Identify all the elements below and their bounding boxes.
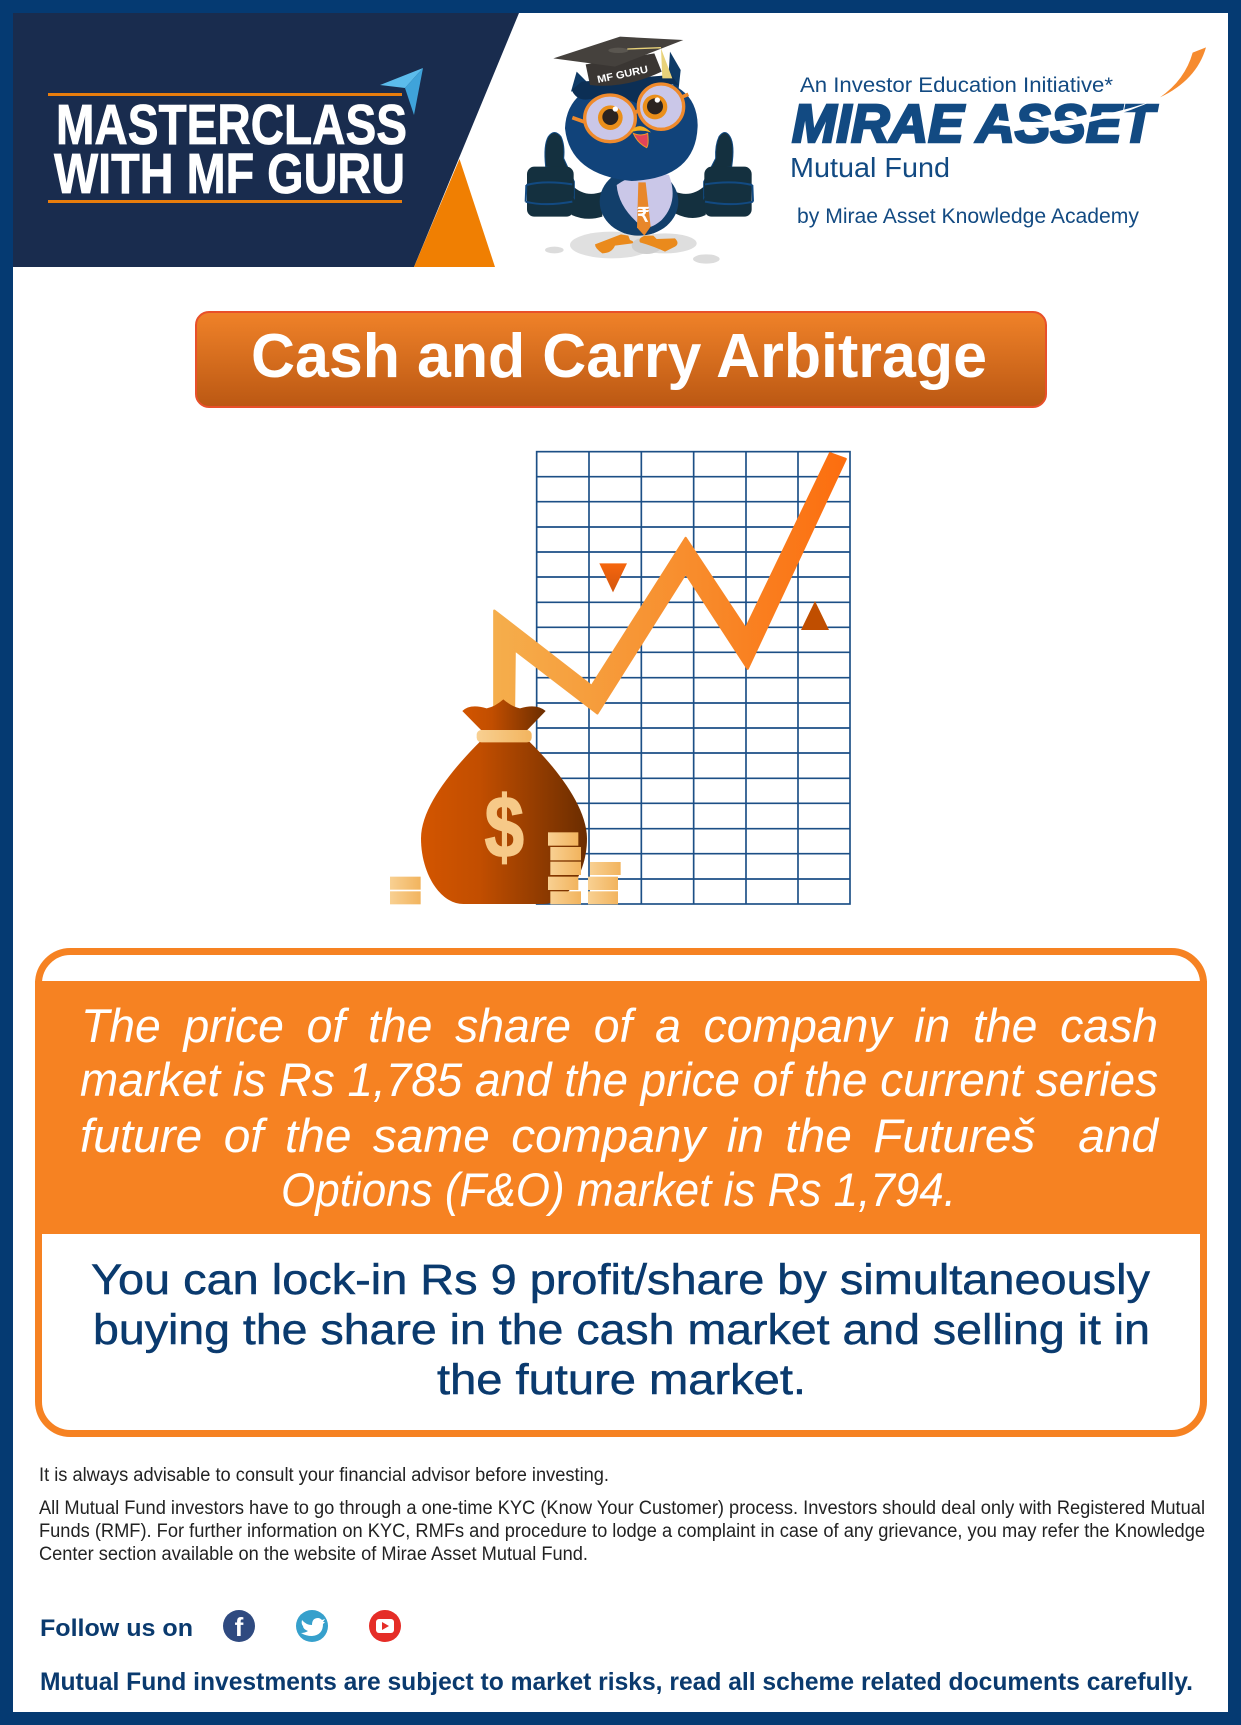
cap label: MF GURU [596, 64, 649, 86]
coin stacks [390, 832, 621, 904]
statement text: Options (F&O) market is Rs 1,794. [281, 1163, 956, 1216]
conclusion text: buying the share in the cash market and selling it in [93, 1307, 1150, 1354]
statement text [80, 999, 1160, 1216]
icon: youtube [369, 1610, 401, 1642]
disclaimer text: Center section available on the website of Mirae Asset Mutual Fund. [39, 1544, 588, 1565]
logo block: mirae asset [790, 47, 1206, 228]
icon: paper plane [380, 68, 423, 115]
statement text: The price of the share of a company in the cash [81, 999, 1158, 1052]
follow label: Follow us on [40, 1615, 193, 1642]
banner rule bottom [48, 200, 402, 203]
grid [537, 452, 850, 904]
owl head [565, 52, 698, 181]
disclaimer text: Funds (RMF). For further information on KYC, RMFs and procedure to lodge a complaint in case of any grievance, you may refer the Knowledge [39, 1521, 1205, 1542]
conclusion text: the future market. [437, 1357, 806, 1404]
chart illustration [390, 452, 850, 904]
icon: facebook [223, 1610, 255, 1642]
feet [595, 234, 677, 253]
orange statement band [35, 981, 1207, 1234]
conclusion text [91, 1257, 1151, 1404]
social row [40, 1610, 401, 1642]
dark banner shape [13, 13, 519, 267]
title text: Cash and Carry Arbitrage [251, 322, 987, 391]
belly [617, 173, 673, 227]
right hand thumb up [704, 132, 753, 217]
wings [572, 185, 706, 219]
disclaimer text: It is always advisable to consult your financial advisor before investing. [39, 1465, 609, 1486]
glasses and eyes [572, 84, 688, 142]
owl mascot [526, 37, 753, 264]
graduation cap [553, 37, 683, 86]
banner rule top [48, 93, 402, 96]
title bar [196, 312, 1046, 407]
money bag [421, 699, 587, 904]
beak [630, 126, 651, 148]
rising arrow line [494, 453, 846, 713]
heading: masterclass: MASTERCLASS [56, 93, 407, 157]
down marker [599, 563, 627, 592]
ground shadow [545, 232, 720, 264]
conclusion text: You can lock-in Rs 9 profit/share by simultaneously [91, 1257, 1151, 1304]
icon: facebook: f [235, 1612, 244, 1642]
disclaimer text [39, 1465, 1205, 1565]
risk statement: Mutual Fund investments are subject to market risks, read all scheme related documents carefully. [40, 1668, 1193, 1696]
header banner: masterclass [13, 13, 519, 267]
statement text: market is Rs 1,785 and the price of the current series [80, 1053, 1158, 1106]
mutual fund: Mutual Fund [790, 152, 950, 183]
owl body [600, 168, 678, 236]
icon: twitter [296, 1610, 328, 1642]
up marker [801, 601, 829, 630]
tie with rupee: ₹ [637, 206, 649, 227]
orange triangle [414, 159, 495, 267]
statement text: future of the same company in the Futureš and [80, 1109, 1160, 1162]
initiative line: An Investor Education Initiative* [800, 73, 1114, 97]
dollar sign: $ [485, 778, 524, 876]
heading: with mf guru: WITH MF GURU [54, 142, 405, 206]
logo swoosh [997, 47, 1206, 128]
tie with rupee [637, 182, 651, 236]
main callout panel [35, 952, 1207, 1434]
brand name: MIRAE ASSET [792, 94, 1158, 154]
academy line: by Mirae Asset Knowledge Academy [797, 204, 1139, 228]
disclaimer text: All Mutual Fund investors have to go through a one-time KYC (Know Your Customer) process. Investors should deal only with Registered Mutual [39, 1498, 1205, 1519]
left hand thumb up [526, 132, 574, 217]
